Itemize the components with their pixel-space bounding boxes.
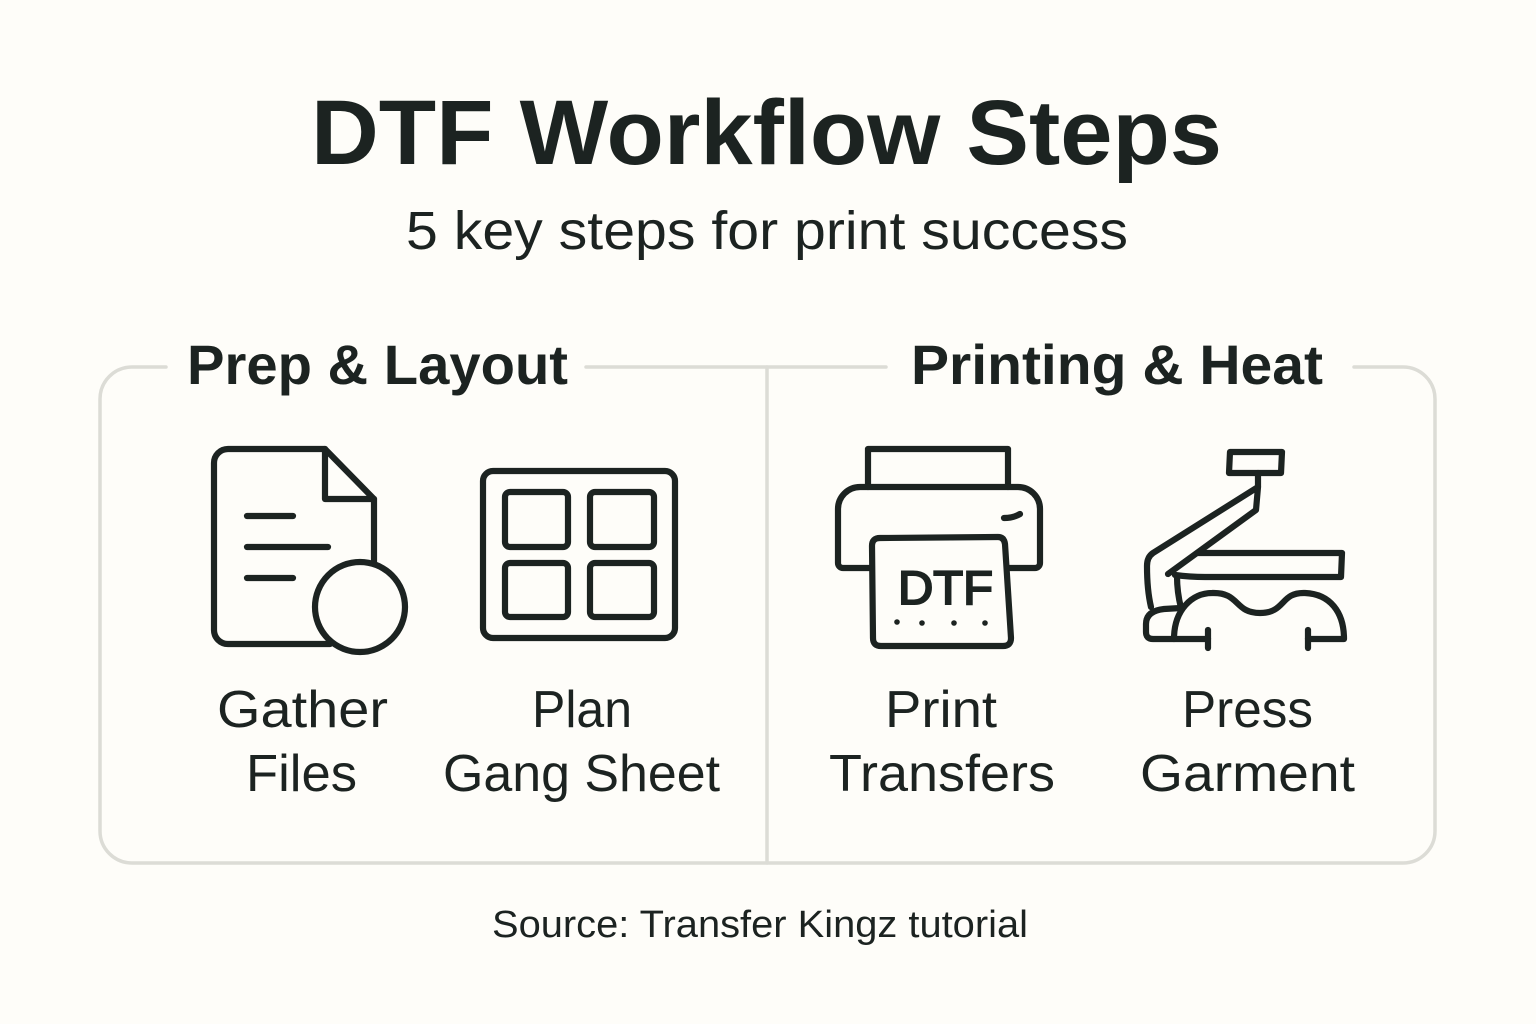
icon: heat press [1146,452,1344,648]
icon: gang sheet grid [483,471,675,638]
source note: Source: Transfer Kingz tutorial [492,904,1028,946]
label: Plan Gang Sheet: Plan [532,681,632,739]
label: Plan Gang Sheet [443,681,721,803]
subtitle: 5 key steps for print success [406,201,1128,261]
icon: DTF printer [838,449,1040,646]
label: Gather Files [217,681,388,803]
label: Print Transfers: Print [885,681,998,739]
label: Print Transfers [829,681,1055,803]
title: DTF Workflow Steps [311,82,1222,184]
panel frame with divider [100,367,1435,863]
heading: Prep & Layout: Prep & Layout [187,333,568,396]
label: Gather Files: Gather [217,681,388,739]
label: Print Transfers: Transfers [829,745,1055,803]
icon: DTF printer: DTF [898,561,993,614]
heading: Printing & Heat: Printing & Heat [911,333,1323,396]
label: Gather Files: Files [246,745,357,803]
icon: document with circle [214,449,405,652]
label: Press Garment: Garment [1140,745,1356,803]
label: Press Garment [1140,681,1356,803]
label: Plan Gang Sheet: Gang Sheet [443,745,721,803]
label: Press Garment: Press [1182,681,1313,739]
